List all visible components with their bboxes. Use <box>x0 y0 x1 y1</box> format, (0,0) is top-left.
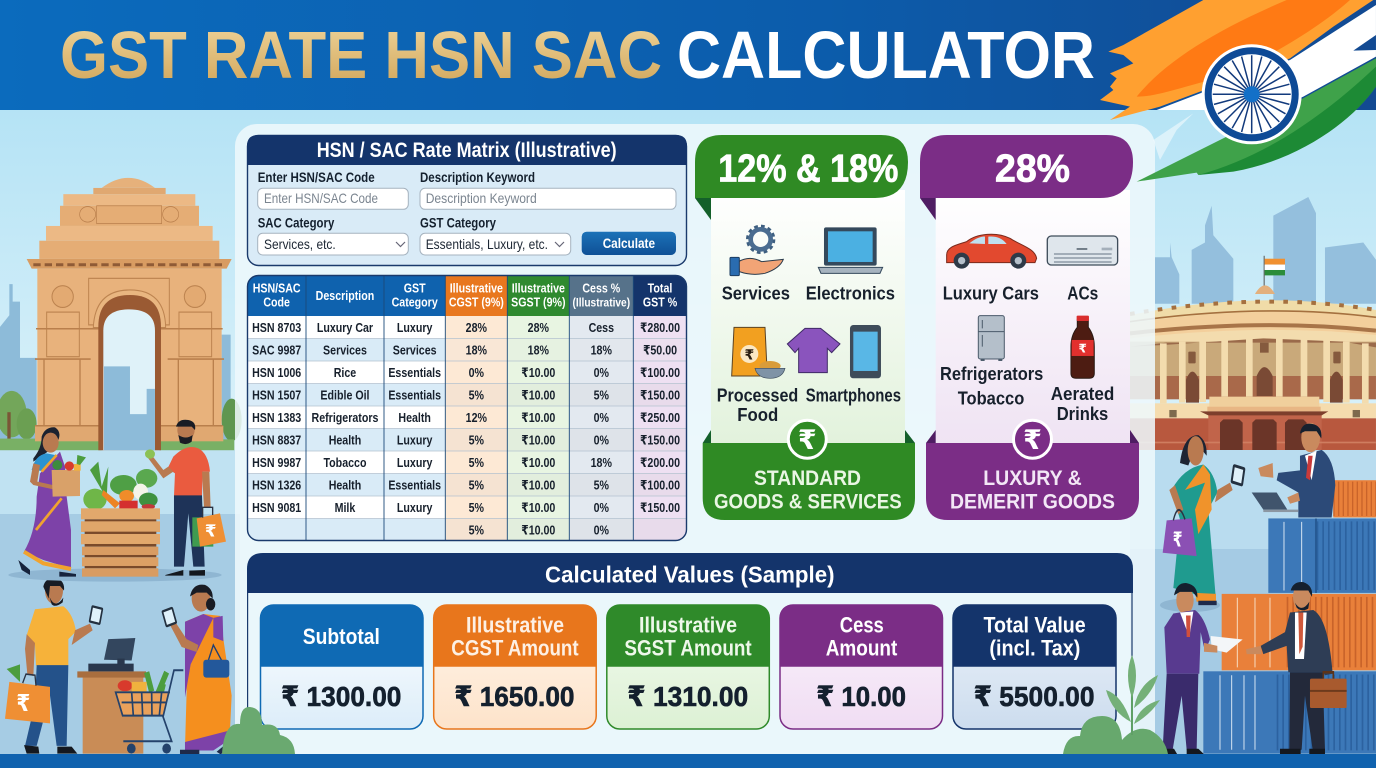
calculated values heading: Calculated Values (Sample) <box>545 561 834 587</box>
card: total value: ₹ 5500.00 <box>974 681 1094 712</box>
man in red shirt with orange bag: ₹ <box>205 522 216 541</box>
rate matrix table <box>247 275 687 541</box>
column headers: SGST (9%) <box>511 295 566 310</box>
row: blank totals: 5% <box>469 522 484 538</box>
row: SAC 9987: 18% <box>466 342 487 358</box>
row: HSN 1383: ₹250.00 <box>640 410 680 425</box>
card body <box>711 190 905 445</box>
row: HSN 9081: 5% <box>469 500 484 515</box>
column headers: Cess % <box>582 281 621 296</box>
India Gate monument <box>27 178 232 450</box>
row: HSN 9987: ₹200.00 <box>640 455 680 470</box>
row: HSN 1326: Health <box>329 477 361 493</box>
column headers: GST % <box>643 295 678 310</box>
rate banner: 12% & 18% <box>718 148 898 191</box>
table row fills <box>247 316 687 541</box>
row: HSN 1006: Essentials <box>388 365 441 380</box>
column headers: CGST (9%) <box>449 295 504 310</box>
vegetable crate <box>81 462 160 577</box>
row: HSN 1006: ₹10.00 <box>521 365 556 380</box>
row: HSN 9987: ₹10.00 <box>521 455 556 470</box>
calculate button: Calculate <box>603 235 655 251</box>
icons and item labels <box>940 234 1118 424</box>
row: HSN 9081: 0% <box>594 500 609 515</box>
row: HSN 1383: Refrigerators <box>312 410 379 425</box>
illustration: city skyline right and flag <box>1155 197 1376 304</box>
label: Processed Food: Food <box>737 405 778 425</box>
label: Services: Services <box>722 283 790 303</box>
man in yellow shirt with phone and bag <box>5 577 103 754</box>
row: HSN 8837: ₹10.00 <box>521 432 556 448</box>
label: Aerated Drinks: Aerated <box>1051 384 1114 404</box>
field: SAC category <box>258 215 408 255</box>
icon: rupee badge: ₹ <box>1023 425 1042 455</box>
checkout counter with monitor <box>77 638 146 754</box>
label: Refrigerators Tobacco: Refrigerators <box>940 364 1043 384</box>
row: HSN 9081: ₹10.00 <box>521 500 556 515</box>
icon: air conditioner <box>1047 236 1118 265</box>
rate banner <box>920 135 1133 220</box>
label: Refrigerators Tobacco <box>940 364 1043 408</box>
panel: calculated values <box>247 553 1133 735</box>
row: HSN 8703: Cess <box>589 320 614 335</box>
calculated values heading <box>247 553 1133 593</box>
icon: cola bottle: ₹ <box>1078 342 1087 356</box>
icons and item labels <box>717 226 901 425</box>
row: HSN 1383: HSN 1383 <box>252 410 302 425</box>
row: SAC 9987: 18% <box>528 342 549 358</box>
card: total value: Total Value <box>984 612 1086 637</box>
row: HSN 1507 <box>252 387 680 403</box>
main title <box>60 18 1095 93</box>
row: HSN 9081: ₹150.00 <box>640 500 680 515</box>
row: HSN 1507: 5% <box>469 387 484 403</box>
card: subtotal: Subtotal <box>303 624 380 649</box>
row: HSN 1326: 5% <box>594 477 609 493</box>
row: HSN 8837 <box>252 432 680 448</box>
row: HSN 8837: Luxury <box>397 432 433 448</box>
label: Processed Food: Processed <box>717 386 798 406</box>
row: HSN 1507: ₹150.00 <box>640 387 680 403</box>
icon: cola bottle <box>1071 316 1094 378</box>
icon: smartphone <box>850 325 881 378</box>
field: SAC category: SAC Category <box>258 215 334 231</box>
row: HSN 9987: 5% <box>469 455 484 470</box>
row: HSN 1326: ₹100.00 <box>640 477 680 493</box>
field: GST category: Essentials, Luxury, etc. <box>426 236 548 252</box>
card: cess amount: Amount <box>826 636 898 661</box>
illustration: India Gate and lower shoppers <box>0 178 242 754</box>
card body <box>936 190 1130 445</box>
icon: rupee badge <box>1014 420 1052 458</box>
field: description keyword: Description Keyword <box>426 190 537 206</box>
table text <box>252 281 680 538</box>
row: SAC 9987: 18% <box>591 342 612 358</box>
row: blank totals <box>469 522 609 538</box>
row: HSN 1006 <box>252 365 680 380</box>
row: HSN 1006: ₹100.00 <box>640 365 680 380</box>
row: HSN 1006: Rice <box>334 365 357 380</box>
row: HSN 1507: ₹10.00 <box>521 387 556 403</box>
label: Aerated Drinks: Drinks <box>1057 404 1108 424</box>
column headers: Total <box>648 281 672 296</box>
label: Luxury Cars: Luxury Cars <box>943 283 1039 303</box>
skyline left <box>0 284 231 449</box>
field: HSN SAC code: Enter HSN/SAC Code <box>264 190 378 206</box>
card: total value <box>953 605 1116 729</box>
trees left and right <box>0 391 242 450</box>
form heading: HSN / SAC Rate Matrix (Illustrative) <box>317 139 617 162</box>
category band: GOODS & SERVICES <box>714 490 902 513</box>
table column header fills <box>247 275 687 316</box>
row: SAC 9987: Services <box>323 342 367 358</box>
row: HSN 8837: ₹150.00 <box>640 432 680 448</box>
row: HSN 9081: Luxury <box>397 500 433 515</box>
main title: CALCULATOR <box>677 18 1095 93</box>
label: Aerated Drinks <box>1051 384 1114 424</box>
woman in teal sari with phone and purple bag <box>1160 435 1246 612</box>
column headers: Code <box>263 295 290 310</box>
row: HSN 8703: HSN 8703 <box>252 320 302 335</box>
shopping cart <box>116 670 183 754</box>
category band: LUXURY & <box>983 467 1082 490</box>
row: HSN 9081: Milk <box>335 500 356 515</box>
row: HSN 1326 <box>252 477 680 493</box>
Ashoka Chakra emblem <box>1202 44 1302 144</box>
icon: processed food packet <box>732 327 785 378</box>
label: ACs: ACs <box>1067 283 1098 303</box>
row: HSN 1507: Essentials <box>388 387 441 403</box>
row: HSN 1383: Health <box>398 410 431 425</box>
label: Electronics: Electronics <box>806 283 895 303</box>
row: HSN 9987: HSN 9987 <box>252 455 302 470</box>
icon: rupee badge <box>788 420 826 458</box>
row: HSN 1383: ₹10.00 <box>521 410 556 425</box>
card: total value: (incl. Tax) <box>989 636 1080 661</box>
card: illustrative SGST amount: ₹ 1310.00 <box>627 681 748 712</box>
row: HSN 1326: 5% <box>469 477 484 493</box>
column headers: Illustrative <box>450 281 503 296</box>
Indian flag ribbon <box>1100 0 1376 182</box>
row: HSN 8703: ₹280.00 <box>640 320 680 335</box>
card: illustrative CGST amount: CGST Amount <box>451 636 579 661</box>
icon: processed food packet: ₹ <box>744 346 754 362</box>
card: illustrative CGST amount: Illustrative <box>466 612 564 637</box>
field: HSN SAC code <box>258 169 408 209</box>
woman in purple sari with groceries <box>18 427 86 577</box>
row: HSN 8703 <box>252 320 680 335</box>
card: illustrative CGST amount <box>434 605 596 729</box>
row: HSN 9987: Tobacco <box>323 455 366 470</box>
illustration: produce market scene <box>8 420 226 582</box>
form heading <box>247 135 687 165</box>
card: illustrative CGST amount: ₹ 1650.00 <box>454 681 574 712</box>
row: blank totals: ₹10.00 <box>521 522 556 538</box>
panel: 12% and 18% standard goods and services <box>695 135 915 520</box>
row: HSN 9987: 18% <box>591 455 612 470</box>
row: blank totals: 0% <box>594 522 609 538</box>
column headers: Category <box>392 295 438 310</box>
icon: rupee badge: ₹ <box>798 425 817 455</box>
calculate button <box>582 232 676 255</box>
field: GST category <box>420 215 571 255</box>
illustration: traders and shipping containers <box>1160 423 1376 756</box>
panel: HSN SAC rate matrix form <box>247 135 687 266</box>
column headers: Description <box>316 288 374 303</box>
column headers: Illustrative <box>512 281 565 296</box>
row: HSN 8837: 5% <box>469 432 484 448</box>
field: HSN SAC code: Enter HSN/SAC Code <box>258 169 375 185</box>
row: HSN 1326: Essentials <box>388 477 441 493</box>
column headers: HSN/SAC <box>253 281 301 296</box>
icon: refrigerator <box>978 316 1004 361</box>
businessman at laptop <box>1252 423 1335 517</box>
icon: shirt <box>787 328 840 373</box>
row: HSN 8837: Health <box>329 432 361 448</box>
row: HSN 8703: Luxury <box>397 320 433 335</box>
row: HSN 8837: 0% <box>594 432 609 448</box>
central panel backdrop <box>235 124 1155 754</box>
woman in teal sari with phone and purple bag: ₹ <box>1173 528 1183 551</box>
category band <box>703 430 915 520</box>
rate banner <box>695 135 908 220</box>
field: GST category: GST Category <box>420 215 496 231</box>
woman in orange sari with phone <box>161 585 232 754</box>
field: description keyword <box>420 169 676 209</box>
rate banner: 28% <box>995 148 1070 191</box>
column headers <box>253 281 678 310</box>
category band: STANDARD <box>754 467 861 490</box>
man in red shirt with orange bag <box>145 420 226 576</box>
label: Smartphones: Smartphones <box>806 386 901 406</box>
label: Processed Food <box>717 386 798 425</box>
businessman in purple suit <box>1162 583 1243 756</box>
icon: laptop <box>818 227 883 273</box>
row: HSN 1006: 0% <box>469 365 484 380</box>
card: illustrative SGST amount: SGST Amount <box>624 636 752 661</box>
row: HSN 9081 <box>252 500 680 515</box>
footer bar <box>0 754 1376 768</box>
row: SAC 9987: Services <box>393 342 437 358</box>
row: HSN 1326: ₹10.00 <box>521 477 556 493</box>
card: cess amount <box>780 605 942 729</box>
category band: DEMERIT GOODS <box>950 490 1115 513</box>
header banner <box>0 0 1376 110</box>
ground shadow <box>8 568 222 582</box>
row: HSN 1383: 0% <box>594 410 609 425</box>
card: cess amount: ₹ 10.00 <box>816 681 906 712</box>
field: SAC category: Services, etc. <box>264 236 336 252</box>
column headers: GST <box>404 281 426 296</box>
businessman with briefcase <box>1246 582 1347 756</box>
row: HSN 8703: Luxury Car <box>317 320 373 335</box>
row: HSN 9081: HSN 9081 <box>252 500 302 515</box>
main title: GST RATE HSN SAC <box>60 18 662 93</box>
foliage bushes at panel base <box>222 655 1168 754</box>
column headers: (Illustrative) <box>573 297 630 310</box>
row: HSN 1383: 12% <box>466 410 487 425</box>
row: HSN 1507: Edible Oil <box>320 387 370 403</box>
label: Refrigerators Tobacco: Tobacco <box>958 388 1024 408</box>
field: description keyword: Description Keyword <box>420 169 535 185</box>
card: illustrative SGST amount: Illustrative <box>639 612 737 637</box>
row: HSN 8703: 28% <box>528 320 549 335</box>
card: cess amount: Cess <box>840 612 884 637</box>
row: HSN 1006: HSN 1006 <box>252 365 302 380</box>
row: HSN 8837: HSN 8837 <box>252 432 302 448</box>
category band <box>926 430 1139 520</box>
icon: services gear and hand <box>730 226 783 276</box>
card: illustrative SGST amount <box>607 605 769 729</box>
row: SAC 9987: ₹50.00 <box>643 342 677 358</box>
row: HSN 1507: HSN 1507 <box>252 387 302 403</box>
row: HSN 8703: 28% <box>466 320 487 335</box>
row: HSN 9987 <box>252 455 680 470</box>
row: HSN 1006: 0% <box>594 365 609 380</box>
row: HSN 1326: HSN 1326 <box>252 477 302 493</box>
icon: red car <box>947 234 1037 269</box>
card: subtotal <box>260 605 423 729</box>
row: SAC 9987: SAC 9987 <box>252 342 302 358</box>
man in yellow shirt with phone and bag: ₹ <box>16 690 30 716</box>
shipping containers <box>1203 480 1376 754</box>
row: HSN 1507: 5% <box>594 387 609 403</box>
row: SAC 9987 <box>252 342 677 358</box>
illustration: Parliament House <box>1130 300 1376 450</box>
row: HSN 1383 <box>252 410 680 425</box>
panel: 28% luxury and demerit goods <box>920 135 1139 520</box>
card: subtotal: ₹ 1300.00 <box>281 681 401 712</box>
row: HSN 9987: Luxury <box>397 455 433 470</box>
